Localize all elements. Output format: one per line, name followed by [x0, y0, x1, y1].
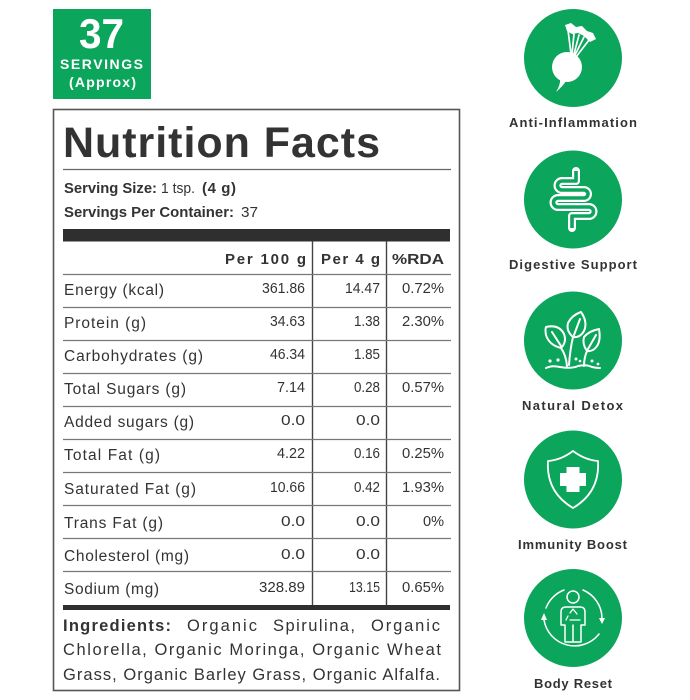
icon: shield with cross	[524, 430, 622, 528]
row: sodium: 0.65%	[402, 580, 444, 596]
row: protein: Protein (g)	[64, 315, 146, 332]
row: total fat: 0.16	[354, 446, 380, 462]
row: energy: Energy (kcal)	[64, 282, 164, 299]
ingredients: Organic	[187, 617, 257, 635]
icon: sprouting leaves	[524, 292, 622, 390]
row: cholesterol: 0.0	[356, 547, 380, 563]
ingredients: Ingredients:	[63, 617, 171, 635]
row: added sugars	[64, 413, 380, 431]
servings per container: 37	[241, 204, 258, 221]
row: cholesterol: 0.0	[281, 547, 305, 563]
row: energy	[64, 281, 444, 299]
ingredients: Grass, Organic Barley Grass, Organic Alfalfa.	[63, 666, 440, 684]
badge: 37 servings: SERVINGS	[60, 56, 143, 72]
benefit: immunity boost: Immunity Boost	[518, 537, 628, 552]
table header: Per 100 g	[225, 251, 306, 268]
row: total fat: Total Fat (g)	[64, 447, 160, 464]
panel: nutrition facts	[54, 110, 460, 690]
row: energy: 0.72%	[402, 281, 444, 297]
row: total fat	[64, 446, 444, 464]
row: saturated fat: 10.66	[270, 480, 305, 496]
ingredients: Organic	[371, 617, 440, 635]
row: trans fat	[64, 514, 444, 532]
benefit: body reset	[524, 569, 622, 691]
ingredients	[63, 617, 441, 684]
badge: 37 servings	[53, 9, 151, 99]
row: total fat: 0.25%	[402, 446, 444, 462]
benefit: digestive support	[509, 150, 638, 272]
row: carbohydrates: 46.34	[270, 347, 305, 363]
servings per container: Servings Per Container:	[64, 204, 234, 221]
row: carbohydrates: Carbohydrates (g)	[64, 348, 203, 365]
row: carbohydrates	[64, 347, 380, 365]
benefit: digestive support: Digestive Support	[509, 257, 638, 272]
row: saturated fat: 1.93%	[402, 480, 444, 496]
row: sodium: Sodium (mg)	[64, 581, 159, 598]
ingredients: Spirulina,	[273, 617, 355, 635]
icon: beetroot	[524, 9, 622, 107]
benefit: immunity boost	[518, 430, 628, 552]
benefit: body reset: Body Reset	[534, 676, 613, 691]
serving size: 1 tsp.	[161, 180, 195, 197]
benefit: anti-inflammation	[509, 9, 637, 130]
benefit: natural detox: Natural Detox	[522, 398, 624, 413]
row: saturated fat	[64, 480, 444, 498]
row: trans fat: 0.0	[281, 514, 305, 530]
table header: Per 4 g	[321, 251, 380, 268]
row: total sugars: Total Sugars (g)	[64, 381, 186, 398]
row: cholesterol	[64, 547, 380, 565]
benefit: natural detox	[522, 292, 624, 413]
row: total sugars: 0.57%	[402, 380, 444, 396]
row: protein: 34.63	[270, 314, 305, 330]
badge: 37 servings: 37	[79, 10, 124, 57]
row: energy: 14.47	[345, 281, 380, 297]
row: trans fat: Trans Fat (g)	[64, 515, 163, 532]
serving size: (4 g)	[202, 180, 236, 197]
row: sodium: 328.89	[259, 580, 305, 596]
row: trans fat: 0%	[423, 514, 444, 530]
row: cholesterol: Cholesterol (mg)	[64, 548, 189, 565]
row: total fat: 4.22	[277, 446, 305, 462]
row: added sugars: Added sugars (g)	[64, 414, 194, 431]
row: saturated fat: 0.42	[354, 480, 380, 496]
row: sodium	[64, 580, 444, 598]
badge: 37 servings: (Approx)	[69, 74, 136, 90]
row: trans fat: 0.0	[356, 514, 380, 530]
icon: person with cycle arrows	[524, 569, 622, 667]
table header	[225, 251, 444, 268]
row: sodium: 13.15	[349, 580, 380, 596]
row: protein: 2.30%	[402, 314, 444, 330]
row: total sugars: 7.14	[277, 380, 305, 396]
serving size	[64, 180, 236, 197]
row: saturated fat: Saturated Fat (g)	[64, 481, 196, 498]
row: protein: 1.38	[354, 314, 380, 330]
icon: intestine	[524, 150, 622, 248]
row: added sugars: 0.0	[281, 413, 305, 429]
benefit: anti-inflammation: Anti-Inflammation	[509, 115, 637, 130]
ingredients: Chlorella, Organic Moringa, Organic Wheat	[63, 641, 441, 659]
row: total sugars	[64, 380, 444, 398]
serving size: Serving Size:	[64, 180, 157, 197]
row: added sugars: 0.0	[356, 413, 380, 429]
row: protein	[64, 314, 444, 332]
row: carbohydrates: 1.85	[354, 347, 380, 363]
row: total sugars: 0.28	[354, 380, 380, 396]
row: energy: 361.86	[262, 281, 305, 297]
table header: %RDA	[392, 251, 444, 268]
title: Nutrition Facts	[63, 119, 380, 167]
